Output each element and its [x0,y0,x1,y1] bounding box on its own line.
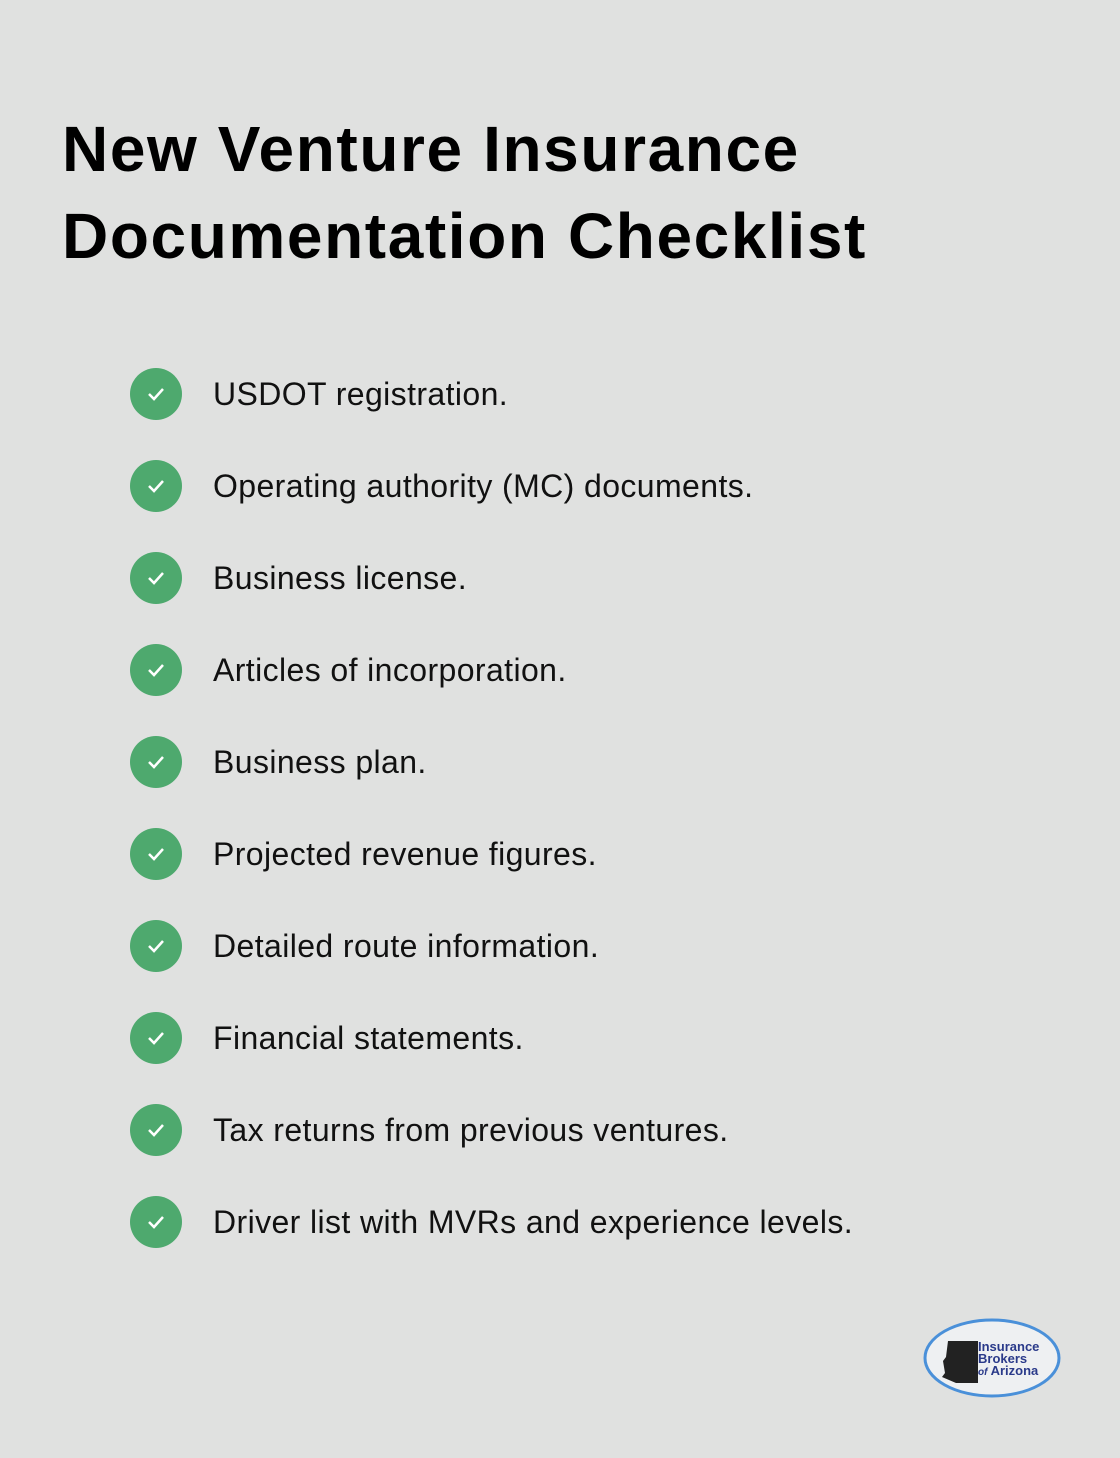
title [62,113,867,272]
item 8 [130,1012,524,1064]
item 7 [130,920,599,972]
item 10 [130,1196,853,1248]
item 9 [130,1104,729,1156]
item 4: Articles of incorporation. [213,652,567,688]
item 5: Business plan. [213,744,427,780]
item 1: USDOT registration. [213,376,508,412]
logo: of Arizona [978,1363,1039,1378]
item 8: Financial statements. [213,1020,524,1056]
logo [924,1318,1060,1398]
checklist [130,368,853,1248]
item 7: Detailed route information. [213,928,599,964]
title: New Venture Insurance [62,113,800,185]
item 3: Business license. [213,560,467,596]
item 6 [130,828,597,880]
item 6: Projected revenue figures. [213,836,597,872]
logo: Insurance [978,1339,1039,1354]
item 3 [130,552,467,604]
logo: Brokers [978,1351,1027,1366]
item 1 [130,368,508,420]
item 10: Driver list with MVRs and experience levels. [213,1204,853,1240]
item 2 [130,460,753,512]
item 2: Operating authority (MC) documents. [213,468,753,504]
item 4 [130,644,567,696]
item 5 [130,736,427,788]
title: Documentation Checklist [62,200,867,272]
item 9: Tax returns from previous ventures. [213,1112,729,1148]
